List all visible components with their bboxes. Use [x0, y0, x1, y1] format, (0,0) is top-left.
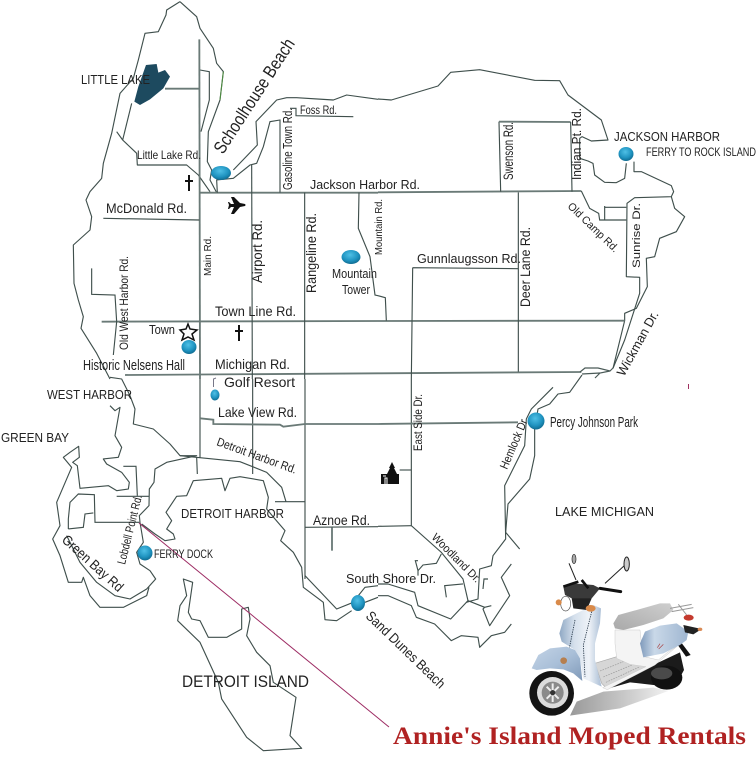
place labels: Hemlock Dr [497, 417, 530, 471]
place labels: East Side Dr. [411, 394, 425, 451]
place labels: Detroit Harbor Rd. [215, 435, 299, 477]
place labels: JACKSON HARBOR [614, 129, 720, 144]
place labels: Town Line Rd. [215, 303, 296, 319]
place labels: Green Bay Rd [59, 531, 127, 595]
place labels: DETROIT HARBOR [181, 506, 284, 521]
moped white frame [603, 630, 677, 690]
location pins [138, 147, 634, 611]
place labels: Old Camp Rd. [565, 201, 621, 255]
place labels: Foss Rd. [300, 103, 337, 117]
place labels: LAKE MICHIGAN [555, 504, 654, 519]
place labels: Mountain [332, 266, 377, 281]
moped rear body [640, 623, 688, 657]
place labels: Mountain Rd. [373, 199, 385, 255]
lake: Little Lake [134, 64, 170, 105]
place labels: Aznoe Rd. [313, 512, 370, 528]
place labels: Deer Lane Rd. [517, 227, 533, 307]
place labels: Rangeline Rd. [303, 213, 319, 293]
icon: golf flag [214, 378, 216, 387]
small red tick [688, 384, 689, 389]
moped headlight and indicators [556, 596, 596, 612]
icon: airplane [228, 197, 246, 214]
place labels: Sunrise Dr. [631, 203, 643, 268]
place labels: Little Lake Rd. [137, 148, 201, 162]
place labels: Woodland Dr. [429, 532, 483, 585]
moped front wheel [529, 671, 574, 716]
place labels: Historic Nelsens Hall [83, 357, 185, 374]
place labels: Town [149, 322, 175, 337]
place labels: Sand Dunes Beach [363, 608, 449, 691]
icon: town star [180, 324, 197, 340]
place labels: Jackson Harbor Rd. [310, 177, 420, 192]
icon: campground tree [381, 462, 399, 484]
moped seat [613, 603, 673, 630]
place labels: Wickman Dr. [614, 308, 662, 378]
map: Detroit Island outline [178, 579, 302, 751]
moped rack and tail light [670, 604, 702, 634]
place labels: Main Rd. [203, 236, 214, 276]
place labels: Indian Pt. Rd. [569, 108, 584, 180]
title: moped rentals: Annie's Island Moped Rentals [393, 723, 746, 750]
place labels: Lake View Rd. [218, 404, 297, 420]
place labels: GREEN BAY [1, 430, 69, 445]
place labels: Gunnlaugsson Rd. [417, 251, 521, 266]
place labels: Gasoline Town Rd. [280, 108, 295, 190]
place labels: Airport Rd. [249, 220, 265, 283]
icon: church cross south [235, 325, 243, 341]
moped engine and rear wheel [607, 640, 691, 690]
moped front fender [532, 647, 582, 681]
place labels: South Shore Dr. [346, 571, 436, 586]
place labels: Percy Johnson Park [550, 414, 638, 431]
place labels: Michigan Rd. [215, 356, 290, 372]
moped shadow [570, 688, 668, 716]
icon: church cross north [185, 175, 193, 191]
place labels: Tower [342, 282, 371, 297]
place labels: WEST HARBOR [47, 387, 132, 402]
moped handlebars and mirrors [563, 554, 629, 600]
place labels: Old West Harbor Rd. [117, 256, 131, 350]
moped leg shield [559, 605, 602, 687]
place labels: Swenson Rd. [501, 122, 516, 180]
place labels: DETROIT ISLAND [182, 672, 309, 691]
moped photo [529, 554, 702, 716]
place labels: Schoolhouse Beach [210, 35, 299, 157]
place labels: LITTLE LAKE [81, 72, 150, 87]
place labels: Golf Resort [224, 374, 295, 390]
connector line to moped rentals [139, 523, 389, 727]
place labels: FERRY DOCK [154, 547, 213, 561]
moped floorboard [595, 657, 647, 688]
place labels: Lobdell Point Rd. [114, 493, 145, 566]
map: road and shoreline network [53, 2, 685, 647]
place labels: McDonald Rd. [106, 200, 187, 216]
